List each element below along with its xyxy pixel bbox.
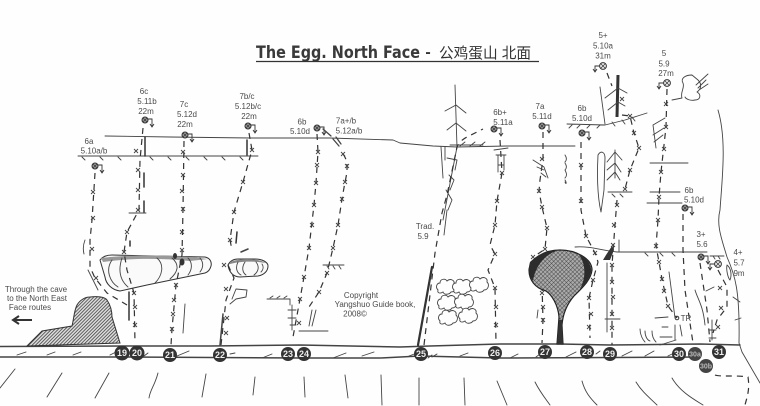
route 7a+/b: 5.12a/b (336, 126, 363, 136)
route numbers: 26 (490, 348, 500, 358)
route 5: 5.9 (658, 60, 670, 68)
top rope anchor: TR (681, 314, 692, 323)
small roof (228, 259, 268, 277)
route 7c: 7c (180, 100, 188, 109)
route 7c: 5.12d (177, 110, 197, 119)
route numbers: 24 (299, 349, 309, 359)
route 3+ (695, 230, 716, 342)
route 25 trad: 5.9 (417, 232, 429, 241)
route numbers: 25 (416, 349, 426, 359)
route 5: 27m (658, 69, 674, 78)
route 6b+: 5.11a (493, 118, 513, 127)
route 7c: 22m (177, 120, 193, 129)
route numbers: 19 (117, 348, 127, 358)
route numbers: 29 (605, 349, 615, 359)
route 6c: 6c (140, 87, 148, 96)
cave directions text: Through the cave (5, 285, 68, 294)
copyright note: Yangshuo Guide book, (335, 300, 415, 309)
route numbers: 27 (540, 347, 550, 357)
flag feature (230, 289, 247, 304)
hatched tree (529, 250, 592, 344)
route 5+: 31m (595, 52, 611, 60)
route 6c: 22m (138, 107, 154, 116)
route 6b left: 5.10d (290, 127, 310, 136)
bottom slope strokes (0, 369, 703, 405)
title: The Egg. North Face (256, 43, 420, 63)
flake and tree (597, 150, 622, 212)
cave directions text (5, 285, 68, 312)
bushes (437, 277, 488, 325)
route numbers: 30 (674, 349, 684, 359)
title: 公鸡蛋山 北面 (439, 45, 531, 62)
route 6c: 5.11b (137, 97, 157, 106)
route 5+: 5.10a (593, 42, 614, 50)
route numbers: 23 (283, 349, 293, 359)
route numbers: 21 (165, 350, 175, 360)
route numbers: 31 (714, 347, 724, 357)
shrub (672, 74, 708, 100)
hatched rock (27, 297, 120, 346)
label 6b right (682, 186, 704, 343)
route numbers: 28 (582, 347, 592, 357)
cliff ledge lines (78, 87, 760, 383)
route 3+: 3+ (696, 230, 706, 239)
route 6a: 6a (85, 137, 94, 146)
top rope anchor (640, 272, 692, 345)
route numbers: 30b (700, 364, 712, 370)
route 5 (653, 49, 677, 318)
route 25 trad: Trad. (416, 222, 434, 231)
copyright note: Copyright (344, 291, 379, 300)
route numbers: 30a (689, 352, 701, 358)
route 6b left (267, 118, 326, 337)
copyright note: 2008© (343, 310, 367, 318)
large roof (100, 255, 211, 291)
route 4+: 5.7 (733, 258, 745, 268)
tree on trad route (443, 85, 466, 220)
ground path (0, 344, 740, 358)
route 7a: 5.11d (532, 112, 552, 121)
route 6a: 5.10a/b (81, 146, 108, 156)
route 7b/c (220, 92, 261, 345)
route 7a+/b: 7a+/b (336, 116, 357, 126)
route 4+ (708, 248, 745, 333)
route numbers: 22 (215, 350, 225, 360)
route 6c (122, 87, 157, 343)
route 6b centre: 5.10d (572, 114, 592, 123)
route 7a (531, 102, 566, 343)
route 7b/c: 7b/c (239, 92, 255, 101)
route 6b+: 6b+ (493, 108, 507, 117)
route numbers (114, 345, 726, 373)
route 7a+/b (299, 116, 363, 331)
title: - (425, 44, 431, 61)
route 7b/c: 22m (241, 112, 257, 121)
route 5+ (593, 31, 641, 345)
route 6b left: 6b (298, 118, 307, 126)
cave directions text: Face routes (9, 303, 51, 312)
route 3+: 5.6 (696, 240, 708, 249)
route 5+: 5+ (598, 31, 608, 40)
route 6b centre: 6b (578, 104, 587, 113)
dashed descent trail (715, 375, 749, 405)
copyright note (335, 291, 415, 318)
cave directions text: to the North East (7, 294, 68, 303)
title (256, 43, 539, 63)
route 7b/c: 5.12b/c (235, 102, 261, 111)
route 6b centre (572, 104, 598, 338)
route 5: 5 (662, 49, 667, 58)
route 4+: 9m (733, 269, 745, 278)
route 7a: 7a (536, 102, 545, 111)
arrow: to the cave (13, 316, 32, 324)
route numbers: 20 (132, 348, 142, 358)
route 4+: 4+ (733, 248, 743, 257)
label 6b right: 5.10d (684, 196, 704, 204)
route 25 trad (416, 129, 485, 345)
route 6a (81, 137, 127, 305)
route 6b+ (488, 108, 513, 343)
route 7c (170, 100, 197, 345)
label 6b right: 6b (685, 186, 694, 195)
